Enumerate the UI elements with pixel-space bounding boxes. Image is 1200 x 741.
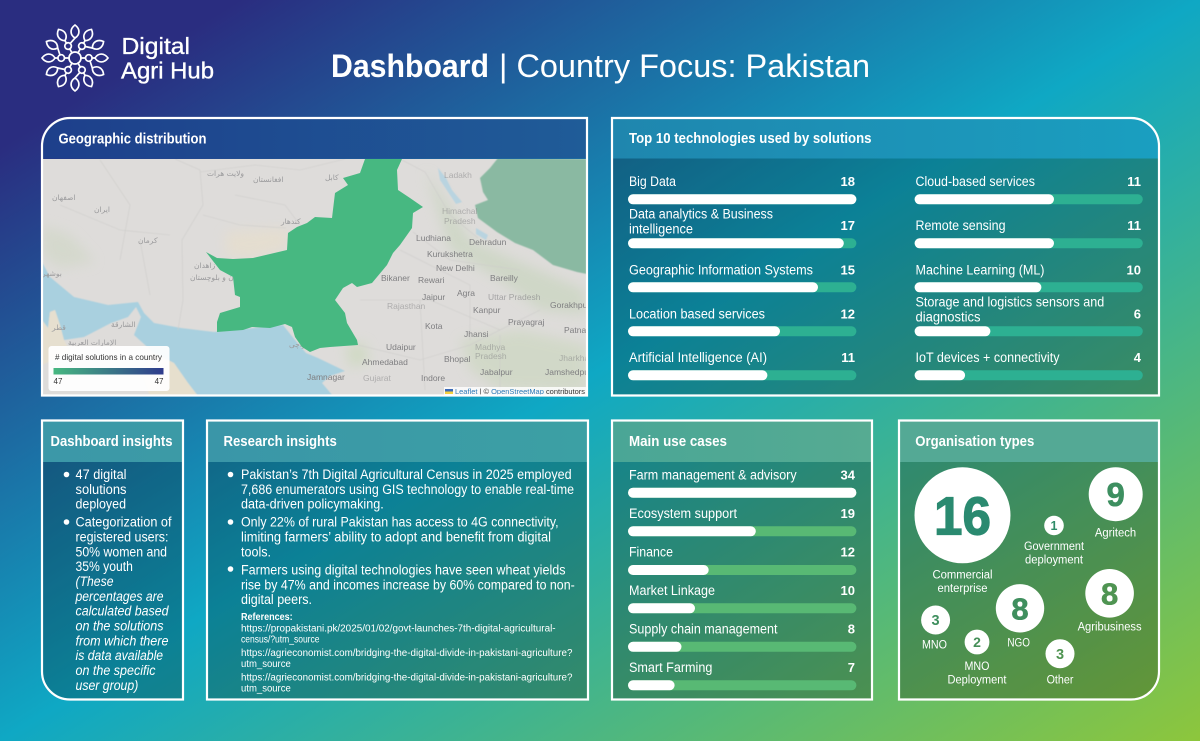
text block: research findings: limiting farmers’ ability to adopt and benefit from digital	[241, 530, 551, 544]
panel: geographic distribution	[41, 118, 599, 396]
bar: Cloud-based services: 11	[1127, 174, 1141, 189]
map labels: Dehradun	[469, 237, 507, 247]
bar: Artificial Intelligence: 11	[841, 350, 855, 365]
panel header: top 10 technologies	[612, 118, 1159, 158]
text block: dashboard insights list: is data available	[76, 648, 163, 663]
bar: Big Data: Big Data	[629, 174, 676, 189]
bar: Smart Farming: 7	[848, 660, 855, 675]
bubble: Commercial enterprise 16	[914, 467, 1010, 595]
map: Pakistan highlighted	[206, 159, 423, 352]
text block: references: utm_source	[241, 684, 291, 694]
bar: Machine Learning	[915, 262, 1143, 292]
map labels: Bikaner	[381, 273, 410, 283]
panel: main use cases	[612, 420, 872, 700]
bubble: MNO Deployment 2	[948, 630, 1007, 686]
icon: logo network of leaves	[41, 19, 109, 97]
text block: research findings: Farmers using digital technologies have seen wheat yields	[241, 562, 566, 578]
text block: research findings: 7,686 enumerators using GIS technology to enable real-time	[241, 482, 574, 497]
map legend: # digital solutions in a country	[55, 352, 163, 362]
bar: Market Linkage	[628, 583, 856, 613]
logo wordmark: Agri Hub	[121, 58, 214, 84]
bubble: NGO 8: NGO	[1007, 638, 1030, 650]
bar: Remote sensing: Remote sensing	[916, 218, 1006, 233]
text block: research findings: rise by 47% and incomes increase by 60% compared to non-	[241, 577, 575, 592]
bar: GIS	[628, 262, 856, 292]
title	[331, 48, 870, 84]
map labels: افغانستان	[253, 175, 283, 184]
panel header: dashboard insights: Dashboard insights	[50, 434, 172, 450]
map labels: کرمان	[138, 236, 158, 245]
map labels: Jamshedpur	[545, 367, 592, 377]
bubble: MNO 3: 3	[932, 613, 940, 629]
bar: Big Data	[628, 174, 856, 204]
bubble: Agritech 9: 9	[1107, 476, 1125, 513]
bubble: Government deployment 1: deployment	[1025, 554, 1084, 566]
panel header: organisation types	[899, 420, 1159, 462]
text block: dashboard insights list: on the specific	[76, 663, 156, 678]
panel header: research insights	[207, 420, 588, 462]
map labels: Bareilly	[490, 273, 519, 283]
bar: Data analytics: intelligence	[629, 221, 693, 236]
map attribution: Leaflet | © OpenStreetMap contributors	[455, 387, 585, 396]
bubble: MNO Deployment 2: MNO	[964, 661, 990, 673]
map labels: کندهار	[280, 217, 301, 226]
map labels: اصفهان	[52, 193, 76, 202]
map labels: Gujarat	[363, 373, 392, 383]
bar: GIS: Geographic Information Systems	[629, 262, 813, 278]
bar: IoT devices	[915, 350, 1143, 380]
text block: research findings	[228, 467, 575, 607]
panel: dashboard insights	[42, 420, 183, 700]
bar: Storage and logistics	[915, 295, 1143, 336]
bar: Artificial Intelligence: Artificial Intelligence (AI)	[629, 350, 767, 365]
text block: dashboard insights list: registered users:	[76, 530, 168, 544]
bar: Big Data: 18	[841, 174, 855, 189]
map labels: الشارقة	[111, 320, 136, 329]
bar: Data analytics: 17	[841, 218, 855, 233]
text block: dashboard insights list: calculated based	[76, 604, 169, 619]
bar: Data analytics	[628, 207, 856, 248]
panel: research insights	[207, 420, 588, 700]
map labels: Pradesh	[444, 216, 476, 226]
bubble: MNO 3: MNO	[922, 640, 947, 652]
bar: Remote sensing: 11	[1127, 218, 1141, 233]
panel: top 10 technologies	[612, 118, 1159, 396]
map legend: 47	[155, 377, 164, 386]
panel header: organisation types: Organisation types	[915, 434, 1034, 450]
bubble: Agribusiness 8: 8	[1101, 576, 1118, 612]
bubble: NGO 8: 8	[1011, 592, 1029, 626]
bubble: Agribusiness 8	[1078, 569, 1142, 634]
text block: research findings: data-driven policymaking.	[241, 496, 384, 512]
panel header: main use cases: Main use cases	[629, 434, 727, 450]
bar: GIS: 15	[841, 262, 855, 278]
bar: Ecosystem support: 19	[841, 506, 855, 521]
map legend	[48, 346, 170, 391]
text block: dashboard insights list: from which there	[76, 633, 168, 648]
map labels: Bhopal	[444, 354, 471, 364]
panel header: research insights: Research insights	[224, 434, 337, 450]
bubble: Government deployment 1	[1024, 516, 1085, 566]
bubble: NGO 8	[996, 584, 1044, 650]
map labels: الإمارات العربية	[68, 338, 116, 347]
bar: Supply chain management: Supply chain management	[629, 622, 778, 637]
title: | Country Focus: Pakistan	[499, 48, 870, 84]
bar: Supply chain management: 8	[848, 622, 855, 637]
map labels: Uttar Pradesh	[488, 292, 541, 302]
bar: Machine Learning: 10	[1127, 262, 1141, 278]
map labels: Himachal	[442, 206, 478, 216]
bar: Data analytics: Data analytics & Business	[629, 207, 773, 222]
text block: dashboard insights list: solutions	[76, 482, 127, 497]
bar: Location based services	[628, 306, 856, 336]
map labels: Madhya	[475, 342, 506, 352]
bar: Cloud-based services: Cloud-based services	[916, 174, 1035, 189]
bar: Location based services: Location based services	[629, 306, 765, 322]
map labels: سیستان و بلوچستان	[190, 273, 254, 282]
map labels: ایران	[94, 205, 110, 214]
map labels: Agra	[457, 288, 475, 298]
map labels: Indore	[421, 373, 445, 383]
bar: Finance: 12	[841, 545, 855, 560]
text block: dashboard insights list: 50% women and	[76, 544, 167, 559]
logo: Digital Agri Hub	[41, 19, 214, 97]
bar: Storage and logistics: diagnostics	[916, 310, 981, 325]
panel header: top 10 technologies: Top 10 technologies used by solutions	[629, 131, 872, 147]
map labels: Kurukshetra	[427, 249, 473, 259]
map labels: Jabalpur	[480, 367, 513, 377]
map legend: 47	[54, 377, 63, 386]
bar: Machine Learning: Machine Learning (ML)	[916, 262, 1044, 278]
text block: dashboard insights list: deployed	[76, 496, 126, 512]
panel: organisation types	[899, 420, 1159, 700]
text block: references: https://propakistani.pk/2025/01/02/govt-launches-7th-digital-agricultural-	[241, 624, 556, 634]
map labels: Rewari	[418, 275, 445, 285]
map labels: Ludhiana	[416, 233, 451, 243]
map labels: Jharkhand	[559, 353, 599, 363]
map labels: ولایت هرات	[207, 169, 244, 178]
bar: Market Linkage: 10	[841, 583, 855, 598]
map labels: کابل	[325, 173, 339, 182]
bar: Ecosystem support	[628, 506, 856, 536]
bubble: Government deployment 1: Government	[1024, 541, 1085, 553]
map labels: Ladakh	[444, 170, 472, 180]
map labels: قطر	[51, 323, 66, 332]
bar: Artificial Intelligence	[628, 350, 856, 380]
text block: dashboard insights list: 47 digital	[76, 467, 126, 482]
bubble: Commercial enterprise 16: Commercial	[932, 570, 992, 582]
map labels: Jhansi	[464, 329, 489, 339]
text block: research findings: digital peers.	[241, 592, 312, 607]
bar: Storage and logistics: 6	[1134, 306, 1141, 322]
bar: Smart Farming	[628, 660, 856, 690]
bar: Storage and logistics: Storage and logistics sensors and	[916, 295, 1104, 310]
map labels: Ahmedabad	[362, 357, 408, 367]
bubble: MNO Deployment 2: 2	[973, 634, 981, 650]
map labels: Pradesh	[475, 351, 507, 361]
bubble: Other 3	[1046, 639, 1074, 686]
bar: IoT devices: 4	[1134, 350, 1142, 365]
bar: Location based services: 12	[841, 306, 855, 322]
map	[41, 158, 599, 396]
text block: research findings: Only 22% of rural Pakistan has access to 4G connectivity,	[241, 515, 559, 530]
bar: Cloud-based services	[915, 174, 1143, 204]
bubble: Other 3: Other	[1047, 674, 1074, 686]
logo wordmark: Digital	[122, 33, 190, 59]
bar: Smart Farming: Smart Farming	[629, 660, 712, 675]
bar: Farm management	[628, 467, 856, 498]
panel header: geographic distribution	[42, 118, 587, 158]
bubble: Government deployment 1: 1	[1051, 519, 1058, 533]
map labels: کراچی	[289, 340, 310, 349]
bar: Farm management: Farm management & advisory	[629, 467, 797, 482]
map labels	[41, 169, 599, 383]
map labels: Kanpur	[473, 305, 501, 315]
text block: dashboard insights list: on the solutions	[76, 618, 164, 634]
panel header: dashboard insights	[42, 420, 183, 462]
text block: references: utm_source	[241, 659, 291, 670]
map labels: Patna	[564, 325, 586, 335]
text block: references: References:	[241, 612, 293, 623]
bubble: Agritech 9: Agritech	[1095, 528, 1136, 540]
text block: research findings: tools.	[241, 544, 271, 559]
text block: dashboard insights list	[64, 467, 172, 693]
bubble: MNO 3	[921, 606, 950, 652]
title: Dashboard	[331, 48, 489, 84]
text block: references: https://agrieconomist.com/bridging-the-digital-divide-in-pakistani-agriculture?	[241, 648, 573, 659]
bar: IoT devices: IoT devices + connectivity	[916, 350, 1060, 365]
bar: Market Linkage: Market Linkage	[629, 583, 715, 598]
bubble: Other 3: 3	[1056, 647, 1064, 663]
text block: dashboard insights list: Categorization of	[76, 515, 172, 530]
map labels: Kota	[425, 321, 443, 331]
bar: Finance: Finance	[629, 545, 673, 560]
panel header: main use cases	[612, 420, 872, 462]
bubble: Agribusiness 8: Agribusiness	[1078, 622, 1142, 634]
bubble: Agritech 9	[1089, 467, 1143, 540]
text block: references	[241, 612, 573, 694]
bubble: MNO Deployment 2: Deployment	[948, 674, 1007, 686]
map labels: Prayagraj	[508, 317, 544, 327]
map labels: Jaipur	[422, 292, 445, 302]
text block: dashboard insights list: (These	[76, 574, 114, 589]
bubble: Commercial enterprise 16: 16	[934, 486, 991, 546]
logo wordmark	[121, 33, 214, 84]
map labels: Gorakhpur	[550, 300, 590, 310]
map labels: بوشهر	[41, 269, 62, 278]
text block: references: census/?utm_source	[241, 634, 320, 646]
bar: Finance	[628, 545, 856, 575]
bar: Farm management: 34	[841, 467, 856, 482]
map labels: New Delhi	[436, 263, 475, 273]
bar: Ecosystem support: Ecosystem support	[629, 506, 737, 521]
text block: dashboard insights list: percentages are	[75, 589, 164, 604]
map labels: Udaipur	[386, 342, 416, 352]
bar: Supply chain management	[628, 622, 856, 652]
text block: references: https://agrieconomist.com/bridging-the-digital-divide-in-pakistani-agriculture?	[241, 672, 573, 683]
text block: dashboard insights list: 35% youth	[76, 559, 133, 574]
map labels: زاهدان	[194, 261, 216, 270]
text block: dashboard insights list: user group)	[76, 678, 138, 693]
bubble: Commercial enterprise 16: enterprise	[938, 583, 988, 595]
map labels: Rajasthan	[387, 301, 426, 311]
text block: research findings: Pakistan’s 7th Digital Agricultural Census in 2025 employed	[241, 467, 572, 482]
bar: Remote sensing	[915, 218, 1143, 248]
panel header: geographic distribution: Geographic distribution	[58, 132, 206, 148]
map labels: Jamnagar	[307, 372, 345, 382]
